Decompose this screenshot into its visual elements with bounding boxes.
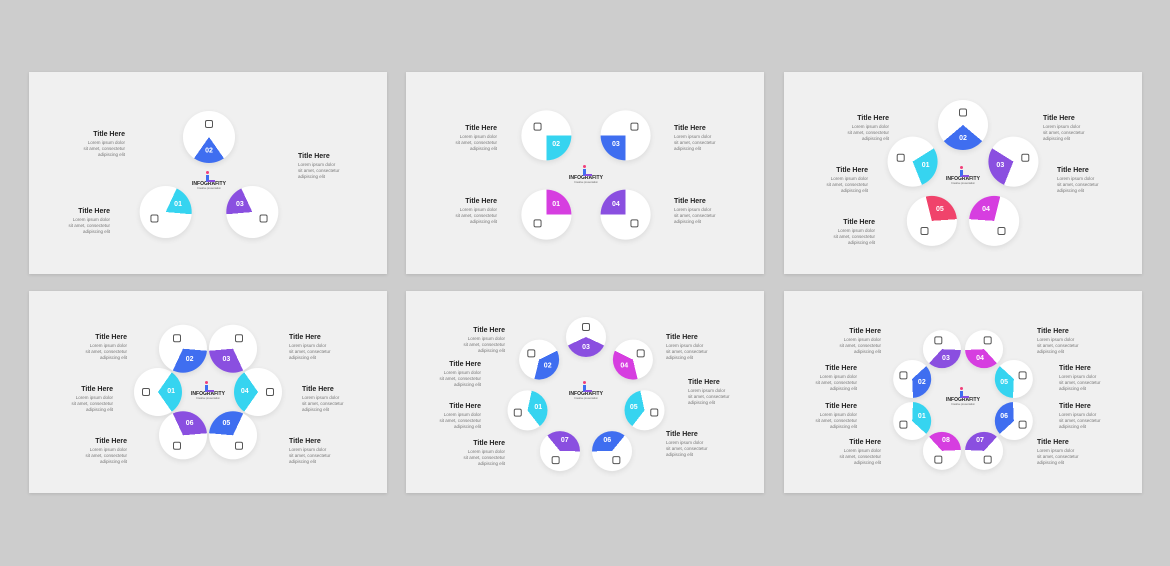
text block: sit amet, consectetur [455,140,497,145]
text block: Title Here [825,365,857,372]
text block: Title Here [449,361,481,368]
panel: 4 steps: 04 [612,201,620,208]
text block: sit amet, consectetur [666,446,708,451]
panel: 6 steps: 04 [241,388,249,395]
text block: sit amet, consectetur [298,168,340,173]
text block [839,328,881,354]
text block: Title Here [688,379,720,386]
text block: Title Here [836,167,868,174]
panel: 6 steps [29,291,387,493]
text block: sit amet, consectetur [674,213,716,218]
logo [192,171,226,190]
text block [847,114,889,141]
text block: adipiscing elit [1037,349,1064,354]
text block: sit amet, consectetur [1037,343,1079,348]
text block: adipiscing elit [470,146,497,151]
text block: Title Here [78,208,110,215]
text block: adipiscing elit [674,219,701,224]
logo [191,381,225,400]
text block: adipiscing elit [862,136,889,141]
text block: Title Here [825,403,857,410]
panel: 4 steps: 02 [552,141,560,148]
text block: Lorem ipsum dolor [302,395,339,400]
text block [1037,438,1107,466]
panel: 8 steps: 08 [942,437,950,444]
panel: 6 steps: 03 [222,356,230,363]
text block: adipiscing elit [100,459,127,464]
text block: Lorem ipsum dolor [1043,124,1080,129]
text block: sit amet, consectetur [1059,418,1101,423]
text block [289,438,331,464]
text block: adipiscing elit [470,219,497,224]
text block: adipiscing elit [854,460,881,465]
text block: Lorem ipsum dolor [90,343,127,348]
text block [68,208,110,234]
text block: Lorem ipsum dolor [73,217,110,222]
text block: Lorem ipsum dolor [1037,337,1074,342]
text block: Lorem ipsum dolor [460,207,497,212]
text block [815,402,857,429]
panel: 6 steps: 01 [167,388,175,395]
text block [1037,327,1107,355]
panel: 7 steps [406,291,764,493]
panel: 7 steps: 02 [544,362,552,369]
text block [666,430,708,457]
circle group [507,317,665,474]
text block: sit amet, consectetur [302,401,344,406]
panel: 6 steps: 06 [186,420,193,427]
text block [298,152,340,179]
text block: Title Here [1043,115,1075,122]
text block: sit amet, consectetur [1043,130,1085,135]
panel: 4 steps: 03 [612,141,620,148]
text block: Title Here [449,403,481,410]
text block [83,130,125,157]
text block: adipiscing elit [1043,136,1070,141]
text block: sit amet, consectetur [71,401,113,406]
panel: 8 steps [784,291,1142,493]
text block: adipiscing elit [830,386,857,391]
logo: INFOGRAFITY [192,181,226,187]
panel: 8 steps: 04 [976,355,984,362]
text block: adipiscing elit [1059,386,1086,391]
panel: 7 steps: 04 [620,362,628,369]
text block: Title Here [465,125,497,132]
panel: 5 steps: 01 [922,162,930,169]
text block: Lorem ipsum dolor [820,412,857,417]
text block [463,326,505,353]
panel: 5 steps: 02 [959,135,967,142]
panel: 4 steps: 01 [552,201,560,208]
text block [1057,166,1099,193]
text block: Lorem ipsum dolor [674,207,711,212]
logo: Creative presentation [574,181,598,184]
text block: Title Here [674,125,706,132]
text block [439,360,481,387]
logo [946,166,980,185]
text block: Title Here [849,439,881,446]
text block: adipiscing elit [454,424,481,429]
panel: 6 steps: 02 [186,356,193,363]
text block: Title Here [302,386,334,393]
logo: Creative presentation [951,182,975,185]
text block: adipiscing elit [298,174,325,179]
text block: Lorem ipsum dolor [838,228,875,233]
text block: adipiscing elit [854,349,881,354]
text block: Lorem ipsum dolor [844,337,881,342]
logo: Creative presentation [197,187,221,190]
text block [302,386,344,412]
text block: sit amet, consectetur [289,453,331,458]
text block: Title Here [473,327,505,334]
text block [674,124,716,151]
text block: Lorem ipsum dolor [820,374,857,379]
text block: Lorem ipsum dolor [289,447,326,452]
text block [85,334,127,360]
text block: Title Here [465,198,497,205]
text block: sit amet, consectetur [289,349,331,354]
text block: adipiscing elit [302,407,329,412]
panel: 7 steps: 03 [582,344,590,351]
text block: adipiscing elit [289,459,316,464]
logo: INFOGRAFITY [946,176,980,182]
text block: adipiscing elit [1059,424,1086,429]
text block: sit amet, consectetur [1037,454,1079,459]
text block: adipiscing elit [454,382,481,387]
text block: Title Here [289,334,321,341]
text block [1043,114,1085,141]
logo [569,165,603,184]
text block: sit amet, consectetur [68,223,110,228]
logo: Creative presentation [951,403,975,406]
text block: sit amet, consectetur [439,376,481,381]
text block [1059,364,1129,392]
text block: adipiscing elit [666,355,693,360]
text block: sit amet, consectetur [688,394,730,399]
text block: Lorem ipsum dolor [444,412,481,417]
text block: adipiscing elit [98,152,125,157]
text block: adipiscing elit [1057,188,1084,193]
text block: adipiscing elit [83,229,110,234]
text block: sit amet, consectetur [839,343,881,348]
text block: sit amet, consectetur [439,418,481,423]
text block [463,440,505,466]
text block: sit amet, consectetur [83,146,125,151]
text block [439,402,481,429]
text block: sit amet, consectetur [815,380,857,385]
text block: Title Here [666,334,698,341]
panel: 7 steps: 06 [603,437,611,444]
panel: 8 steps: 07 [976,437,984,444]
text block: adipiscing elit [478,348,505,353]
text block: sit amet, consectetur [1057,182,1099,187]
panel: 7 steps: 05 [630,404,638,411]
circle group [134,325,282,462]
panel: 5 steps [784,72,1142,274]
text block: adipiscing elit [100,355,127,360]
text block: sit amet, consectetur [85,349,127,354]
text block: Title Here [1037,328,1069,335]
text block: sit amet, consectetur [833,234,875,239]
text block: adipiscing elit [841,188,868,193]
text block: Title Here [666,431,698,438]
text block: adipiscing elit [86,407,113,412]
text block: Title Here [298,153,330,160]
text block: adipiscing elit [674,146,701,151]
text block: Lorem ipsum dolor [460,134,497,139]
text block: Lorem ipsum dolor [1059,412,1096,417]
text block: Lorem ipsum dolor [468,336,505,341]
text block [674,198,716,224]
panel: 8 steps: 06 [1000,413,1008,420]
panel: 8 steps: 01 [918,413,926,420]
text block: adipiscing elit [848,240,875,245]
logo: INFOGRAFITY [569,175,603,181]
text block [455,198,497,224]
text block [833,218,875,245]
logo: INFOGRAFITY [569,391,603,397]
text block: adipiscing elit [289,355,316,360]
text block: sit amet, consectetur [815,418,857,423]
text block: sit amet, consectetur [463,342,505,347]
text block: Title Here [81,386,113,393]
text block: Lorem ipsum dolor [90,447,127,452]
circle group [892,330,1034,472]
text block: Lorem ipsum dolor [468,449,505,454]
text block: adipiscing elit [666,452,693,457]
text block: Lorem ipsum dolor [831,176,868,181]
text block [688,378,730,405]
text block: Title Here [1059,365,1091,372]
text block: sit amet, consectetur [666,349,708,354]
text block: Lorem ipsum dolor [1059,374,1096,379]
logo: INFOGRAFITY [191,391,225,397]
text block [71,386,113,412]
text block [85,438,127,464]
text block: sit amet, consectetur [826,182,868,187]
panel: 8 steps: 02 [918,379,926,386]
text block: sit amet, consectetur [674,140,716,145]
text block: sit amet, consectetur [455,213,497,218]
panel: 4 steps [406,72,764,274]
panel: 3 steps: 03 [236,201,244,208]
text block: Lorem ipsum dolor [666,440,703,445]
text block: Lorem ipsum dolor [1037,448,1074,453]
text block: sit amet, consectetur [847,130,889,135]
text block: sit amet, consectetur [85,453,127,458]
text block: sit amet, consectetur [839,454,881,459]
text block: Title Here [93,131,125,138]
panel: 7 steps: 01 [534,404,542,411]
text block: Title Here [1057,167,1089,174]
text block: Lorem ipsum dolor [674,134,711,139]
text block: Title Here [95,438,127,445]
panel: 3 steps: 02 [205,147,213,154]
text block [289,334,331,360]
text block [1059,402,1129,430]
text block: Title Here [843,219,875,226]
text block: Title Here [849,328,881,335]
circle group [139,111,279,240]
text block: Title Here [857,115,889,122]
circle group [887,100,1039,248]
text block [815,364,857,391]
panel: 5 steps: 03 [996,162,1004,169]
text block: Title Here [1037,439,1069,446]
text block: Lorem ipsum dolor [1057,176,1094,181]
text block: adipiscing elit [478,461,505,466]
text block [455,124,497,151]
logo: Creative presentation [196,397,220,400]
text block: Lorem ipsum dolor [666,343,703,348]
text block: Lorem ipsum dolor [76,395,113,400]
text block: Lorem ipsum dolor [88,140,125,145]
text block [811,438,881,466]
text block: Lorem ipsum dolor [444,370,481,375]
text block: Lorem ipsum dolor [289,343,326,348]
text block [666,334,708,360]
panel: 3 steps: 01 [174,201,182,208]
text block: sit amet, consectetur [1059,380,1101,385]
panel: 8 steps: 05 [1000,379,1008,386]
panel: 7 steps: 07 [561,437,569,444]
text block: Title Here [1059,403,1091,410]
panel: 3 steps [29,72,387,274]
text block: Title Here [473,440,505,447]
text block: Lorem ipsum dolor [844,448,881,453]
text block: Lorem ipsum dolor [688,388,725,393]
text block: adipiscing elit [688,400,715,405]
panel: 5 steps: 05 [936,206,944,213]
circle group [521,110,651,242]
text block: Lorem ipsum dolor [298,162,335,167]
logo [946,387,980,406]
text block [826,166,868,193]
text block: Lorem ipsum dolor [852,124,889,129]
logo: INFOGRAFITY [946,397,980,403]
text block: adipiscing elit [830,424,857,429]
logo [569,381,603,400]
panel: 6 steps: 05 [222,420,230,427]
text block: adipiscing elit [1037,460,1064,465]
text block: Title Here [95,334,127,341]
text block: sit amet, consectetur [463,455,505,460]
panel: 5 steps: 04 [982,206,990,213]
logo: Creative presentation [574,397,598,400]
text block: Title Here [289,438,321,445]
text block: Title Here [674,198,706,205]
panel: 8 steps: 03 [942,355,950,362]
